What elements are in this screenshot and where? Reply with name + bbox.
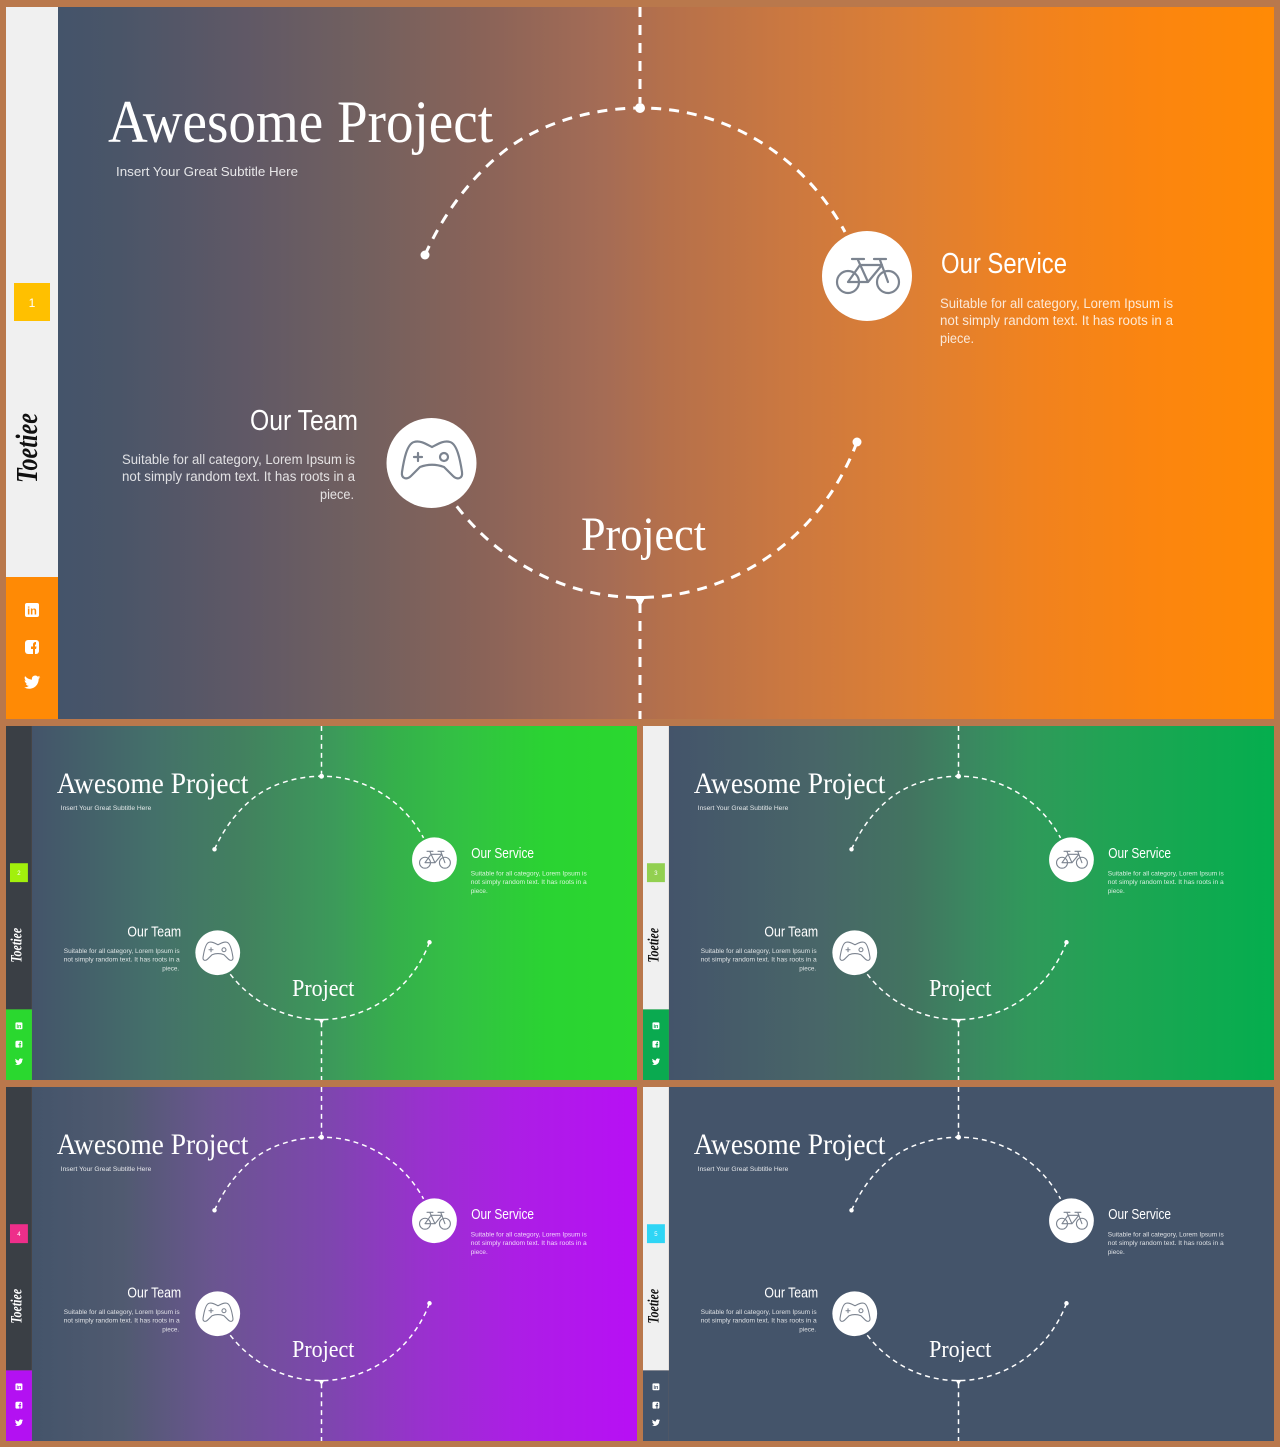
icon: linkedin [652,1022,659,1030]
title: Awesome Project [694,1128,886,1161]
text: our team body: Suitable for all category, Lorem Ipsum is [701,948,817,955]
heading: our team: Our Team [250,405,358,437]
icon: twitter [652,1419,660,1426]
dashed ring [849,726,1069,1080]
text: our team body [701,1309,817,1334]
icon: linkedin: in [653,1385,658,1391]
text: our service body: piece. [1108,888,1125,895]
icon: linkedin: in [16,1024,21,1030]
title: Awesome Project [694,767,886,800]
heading: project: Project [581,508,707,561]
icon: linkedin [15,1383,22,1391]
text: our service body [1108,871,1224,895]
text: our service body: piece. [471,888,488,895]
sidebar [6,726,32,1080]
title: Awesome Project [108,89,493,155]
subtitle: Insert Your Great Subtitle Here [698,805,789,812]
page number badge [14,283,50,321]
text: our service body: Suitable for all category, Lorem Ipsum is [1108,871,1224,878]
heading: project: Project [929,976,992,1002]
heading: our service: Our Service [941,248,1067,280]
icon: twitter [24,676,40,689]
heading: project: Project [292,1337,355,1363]
icon: twitter [15,1058,23,1065]
text: our service body: Suitable for all category, Lorem Ipsum is [940,296,1173,311]
icon: game controller [386,418,476,508]
icon: game controller [832,930,877,975]
logo: Toetiee [8,928,25,963]
icon: game controller [195,930,240,975]
icon: linkedin: in [27,606,37,618]
text: our service body: piece. [471,1249,488,1256]
logo: Toetiee [645,928,662,963]
icon: linkedin [25,603,39,618]
heading: our team: Our Team [764,1285,818,1301]
sidebar [643,726,669,1080]
panel: slide 5 slate [643,1087,1274,1441]
text: our service body: piece. [1108,1249,1125,1256]
text: our service body: Suitable for all category, Lorem Ipsum is [471,1232,587,1239]
heading: our service: Our Service [471,1207,534,1223]
icon: bicycle [412,837,457,882]
page number badge: 4 [17,1232,21,1238]
text: our service body [471,871,587,895]
logo: Toetiee [645,1289,662,1324]
text: our team body: piece. [162,1327,179,1334]
dashed ring [212,726,432,1080]
heading: project: Project [292,976,355,1002]
page number badge [10,863,28,882]
page number badge [10,1224,28,1243]
page number badge: 3 [654,871,658,877]
panel: slide 4 purple [6,1087,637,1441]
page number badge [647,863,665,882]
page number badge: 2 [17,871,21,877]
heading: project: Project [929,1337,992,1363]
text: our team body: piece. [799,1327,816,1334]
text: our service body: not simply random text. It has roots in a [1108,1240,1224,1247]
panel: slide 3 dark green [643,726,1274,1080]
logo: Toetiee [9,413,44,483]
icon: facebook [652,1402,659,1409]
text: our service body: not simply random text. It has roots in a [471,1240,587,1247]
text: our team body: not simply random text. It has roots in a [701,957,817,964]
logo: Toetiee [8,1289,25,1324]
text: our team body: piece. [162,966,179,973]
icon: bicycle [412,1198,457,1243]
icon: facebook [25,640,39,654]
dashed ring [849,1087,1069,1441]
text: our team body: not simply random text. It has roots in a [701,1318,817,1325]
text: our service body: not simply random text. It has roots in a [940,313,1173,328]
icon: facebook [15,1402,22,1409]
icon: linkedin: in [16,1385,21,1391]
subtitle: Insert Your Great Subtitle Here [61,805,152,812]
icon: twitter [652,1058,660,1065]
text: our team body: piece. [320,487,354,502]
title: Awesome Project [57,767,249,800]
page number badge [647,1224,665,1243]
icon: game controller [832,1291,877,1336]
text: our team body: Suitable for all category, Lorem Ipsum is [64,1309,180,1316]
panel: slide 1 orange [6,7,1274,719]
text: our team body: Suitable for all category, Lorem Ipsum is [701,1309,817,1316]
dashed ring [420,7,862,719]
text: our team body: not simply random text. It has roots in a [122,469,355,484]
text: our service body [940,296,1173,346]
text: our team body: not simply random text. It has roots in a [64,957,180,964]
icon: linkedin [652,1383,659,1391]
sidebar [6,1087,32,1441]
heading: our service: Our Service [1108,846,1171,862]
page number badge: 5 [654,1232,658,1238]
text: our service body: not simply random text. It has roots in a [1108,879,1224,886]
panel: slide 2 green [6,726,637,1080]
page number badge: 1 [29,296,36,310]
text: our team body: Suitable for all category, Lorem Ipsum is [122,452,355,467]
text: our team body [701,948,817,973]
text: our service body: not simply random text. It has roots in a [471,879,587,886]
icon: bicycle [822,231,912,321]
subtitle: Insert Your Great Subtitle Here [116,164,298,179]
dashed ring [212,1087,432,1441]
icon: facebook [15,1041,22,1048]
title: Awesome Project [57,1128,249,1161]
icon: twitter [15,1419,23,1426]
icon: linkedin: in [653,1024,658,1030]
sidebar [6,7,58,719]
text: our team body: not simply random text. It has roots in a [64,1318,180,1325]
heading: our team: Our Team [127,924,181,940]
icon: linkedin [15,1022,22,1030]
text: our service body: Suitable for all category, Lorem Ipsum is [471,871,587,878]
subtitle: Insert Your Great Subtitle Here [698,1166,789,1173]
text: our service body [1108,1232,1224,1256]
heading: our service: Our Service [1108,1207,1171,1223]
heading: our team: Our Team [127,1285,181,1301]
text: our service body: Suitable for all category, Lorem Ipsum is [1108,1232,1224,1239]
icon: facebook [652,1041,659,1048]
icon: game controller [195,1291,240,1336]
text: our team body [64,1309,180,1334]
text: our team body [64,948,180,973]
text: our team body: piece. [799,966,816,973]
heading: our team: Our Team [764,924,818,940]
icon: bicycle [1049,1198,1094,1243]
text: our service body [471,1232,587,1256]
heading: our service: Our Service [471,846,534,862]
text: our team body [122,452,355,502]
icon: bicycle [1049,837,1094,882]
text: our service body: piece. [940,331,974,346]
subtitle: Insert Your Great Subtitle Here [61,1166,152,1173]
sidebar [643,1087,669,1441]
text: our team body: Suitable for all category, Lorem Ipsum is [64,948,180,955]
